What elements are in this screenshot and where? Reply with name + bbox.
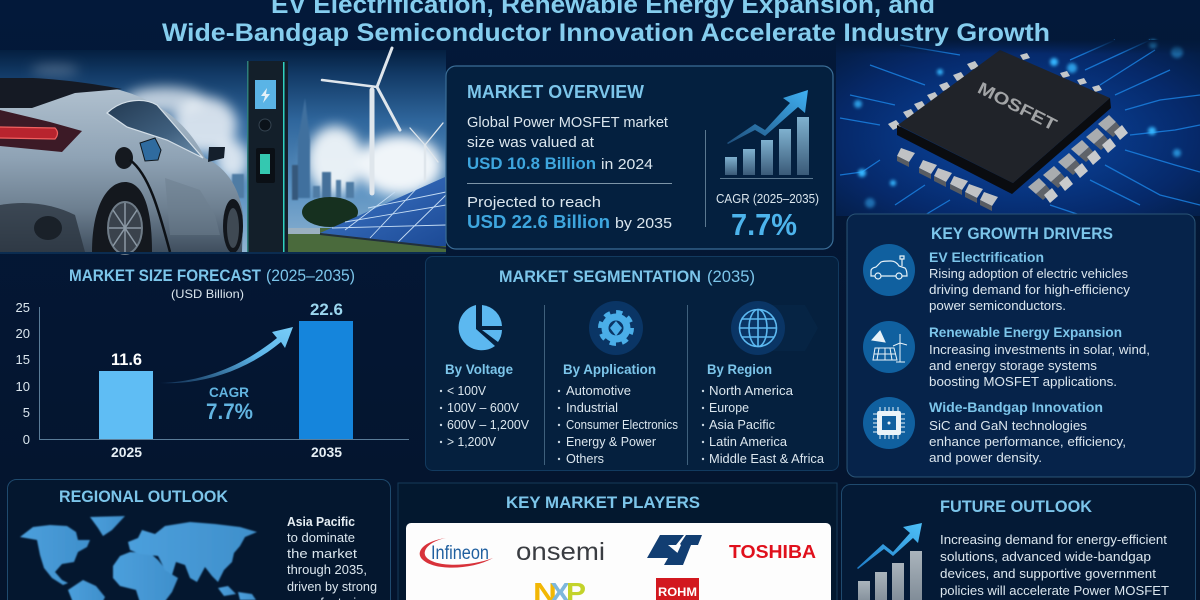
bar chart: 25 — [16, 300, 30, 315]
panel: key growth drivers: SiC and GaN technologies — [929, 418, 1088, 433]
panel: future outlook: solutions, advanced wide-bandgap — [940, 549, 1151, 564]
arrow: CAGR growth — [160, 327, 293, 383]
column: by application: Industrial — [566, 400, 618, 415]
panel: market overview: MARKET OVERVIEW — [467, 82, 644, 102]
bar chart: 15 — [16, 352, 30, 367]
panel: key growth drivers: and power density. — [929, 450, 1042, 465]
bar chart: 22.6 — [310, 301, 343, 319]
column: by application: Automotive — [566, 383, 631, 398]
hero photo: EV charging, wind turbines and solar panels — [0, 48, 446, 254]
panel: market segmentation — [426, 256, 838, 470]
column: by application: By Application — [563, 361, 656, 377]
hero photo: MOSFET chip on circuit board — [836, 40, 1200, 216]
column: by region: Middle East & Africa — [709, 451, 825, 466]
title — [162, 0, 1050, 47]
column: by region — [702, 361, 825, 466]
panel: market size forecast: (USD Billion) — [171, 287, 244, 301]
panel: market size forecast: CAGR — [209, 384, 249, 400]
panel: key market players — [398, 483, 837, 600]
bar chart: 5 — [23, 405, 30, 420]
column: by region: Latin America — [709, 434, 788, 449]
column: by region: Europe — [709, 400, 749, 415]
column: by application: Energy & Power — [566, 434, 657, 449]
panel: key growth drivers: power semiconductors. — [929, 298, 1066, 313]
panel: market overview: CAGR (2025–2035) — [716, 192, 819, 206]
panel: key growth drivers: enhance performance, efficiency, — [929, 434, 1126, 449]
panel: market overview: USD 10.8 Billion — [467, 154, 596, 173]
panel: market segmentation: MARKET SEGMENTATION — [499, 268, 701, 286]
panel: key growth drivers: and energy storage systems — [929, 358, 1098, 373]
panel: regional outlook: through 2035, — [287, 563, 367, 577]
column: by region: By Region — [707, 361, 772, 377]
mini bar chart with arrow — [720, 90, 813, 179]
icon: globe — [731, 301, 818, 355]
column: by voltage: > 1,200V — [447, 434, 496, 449]
logo: NXP — [533, 577, 586, 600]
logo: Infineon — [420, 538, 493, 568]
panel: market overview: by 2035 — [615, 215, 672, 232]
icon: electric car — [863, 244, 915, 296]
column: by voltage: < 100V — [447, 383, 486, 398]
column: by voltage: 600V – 1,200V — [447, 417, 529, 432]
panel: future outlook: FUTURE OUTLOOK — [940, 497, 1093, 516]
logo: onsemi: onsemi — [516, 538, 605, 566]
panel: market size forecast: MARKET SIZE FORECAST — [69, 267, 261, 285]
icon: gear — [589, 301, 643, 355]
lower-right pins — [1028, 115, 1128, 203]
icon: pie chart — [459, 305, 502, 350]
panel: future outlook: Increasing demand for energy-efficient — [940, 532, 1167, 547]
title: Wide-Bandgap Semiconductor Innovation Accelerate Industry Growth — [162, 19, 1050, 47]
panel: regional outlook: to dominate — [287, 531, 355, 545]
bar chart: 0 — [23, 432, 30, 447]
panel: future outlook: policies will accelerate Power MOSFET — [940, 583, 1169, 598]
column: by voltage — [440, 361, 529, 449]
column: by voltage: 100V – 600V — [447, 400, 519, 415]
panel: future outlook — [842, 484, 1196, 600]
logo: Toshiba: TOSHIBA — [729, 542, 816, 562]
panel: key growth drivers: driving demand for high-efficiency — [929, 282, 1131, 297]
panel: key growth drivers: KEY GROWTH DRIVERS — [931, 225, 1113, 243]
icon: chip — [863, 397, 915, 449]
logo: ROHM — [656, 578, 699, 600]
panel: regional outlook: Asia Pacific — [287, 515, 355, 529]
world map — [20, 516, 257, 600]
panel: key growth drivers: Rising adoption of electric vehicles — [929, 266, 1128, 281]
bar chart: 2035 — [311, 445, 342, 460]
panel: key growth drivers: Wide-Bandgap Innovation — [929, 399, 1103, 415]
logo: ST — [647, 535, 702, 565]
panel: key growth drivers: Renewable Energy Expansion — [929, 324, 1122, 340]
icon: growth chart with arrow — [857, 523, 922, 600]
panel: key growth drivers: boosting MOSFET applications. — [929, 374, 1117, 389]
column: by voltage: By Voltage — [445, 361, 513, 377]
column: by application: Others — [566, 451, 604, 466]
panel: market overview: 7.7% — [731, 207, 797, 242]
panel: key market players: KEY MARKET PLAYERS — [506, 494, 700, 512]
bar chart: 20 — [16, 326, 30, 341]
logo: ROHM: ROHM — [658, 585, 697, 599]
panel: key growth drivers: Increasing investments in solar, wind, — [929, 342, 1150, 357]
panel: market size forecast — [16, 267, 409, 460]
hero photo: MOSFET chip on circuit board: MOSFET — [975, 79, 1061, 135]
panel: key growth drivers: EV Electrification — [929, 249, 1044, 265]
panel: market size forecast: 7.7% — [206, 399, 253, 424]
panel: key growth drivers — [847, 214, 1195, 477]
panel: regional outlook — [8, 480, 390, 600]
column: by application: Consumer Electronics — [566, 417, 678, 432]
panel: regional outlook: driven by strong — [287, 580, 377, 594]
column: by region: Asia Pacific — [709, 417, 775, 432]
panel: regional outlook: REGIONAL OUTLOOK — [59, 488, 228, 506]
logo: Infineon: Infineon — [431, 543, 489, 564]
column: by application — [558, 361, 678, 466]
lower-left pins — [897, 148, 998, 211]
bar chart: 10 — [16, 379, 30, 394]
panel: market size forecast: (2025–2035) — [266, 267, 355, 285]
panel: market overview — [446, 66, 833, 249]
column: by region: North America — [709, 383, 794, 398]
panel: market overview: USD 22.6 Billion — [467, 212, 610, 232]
panel: future outlook: devices, and supportive government — [940, 566, 1156, 581]
bar chart: 11.6 — [111, 351, 142, 369]
panel: market overview: Global Power MOSFET market — [467, 114, 669, 131]
panel: market overview: Projected to reach — [467, 194, 601, 211]
panel: market segmentation: (2035) — [707, 268, 755, 286]
panel: market overview: in 2024 — [601, 156, 653, 173]
bar chart: 2025 — [111, 445, 142, 460]
icon: solar and wind — [863, 321, 915, 373]
bar chart — [16, 300, 409, 460]
panel: market overview: size was valued at — [467, 134, 595, 151]
panel: regional outlook: the market — [287, 547, 358, 561]
